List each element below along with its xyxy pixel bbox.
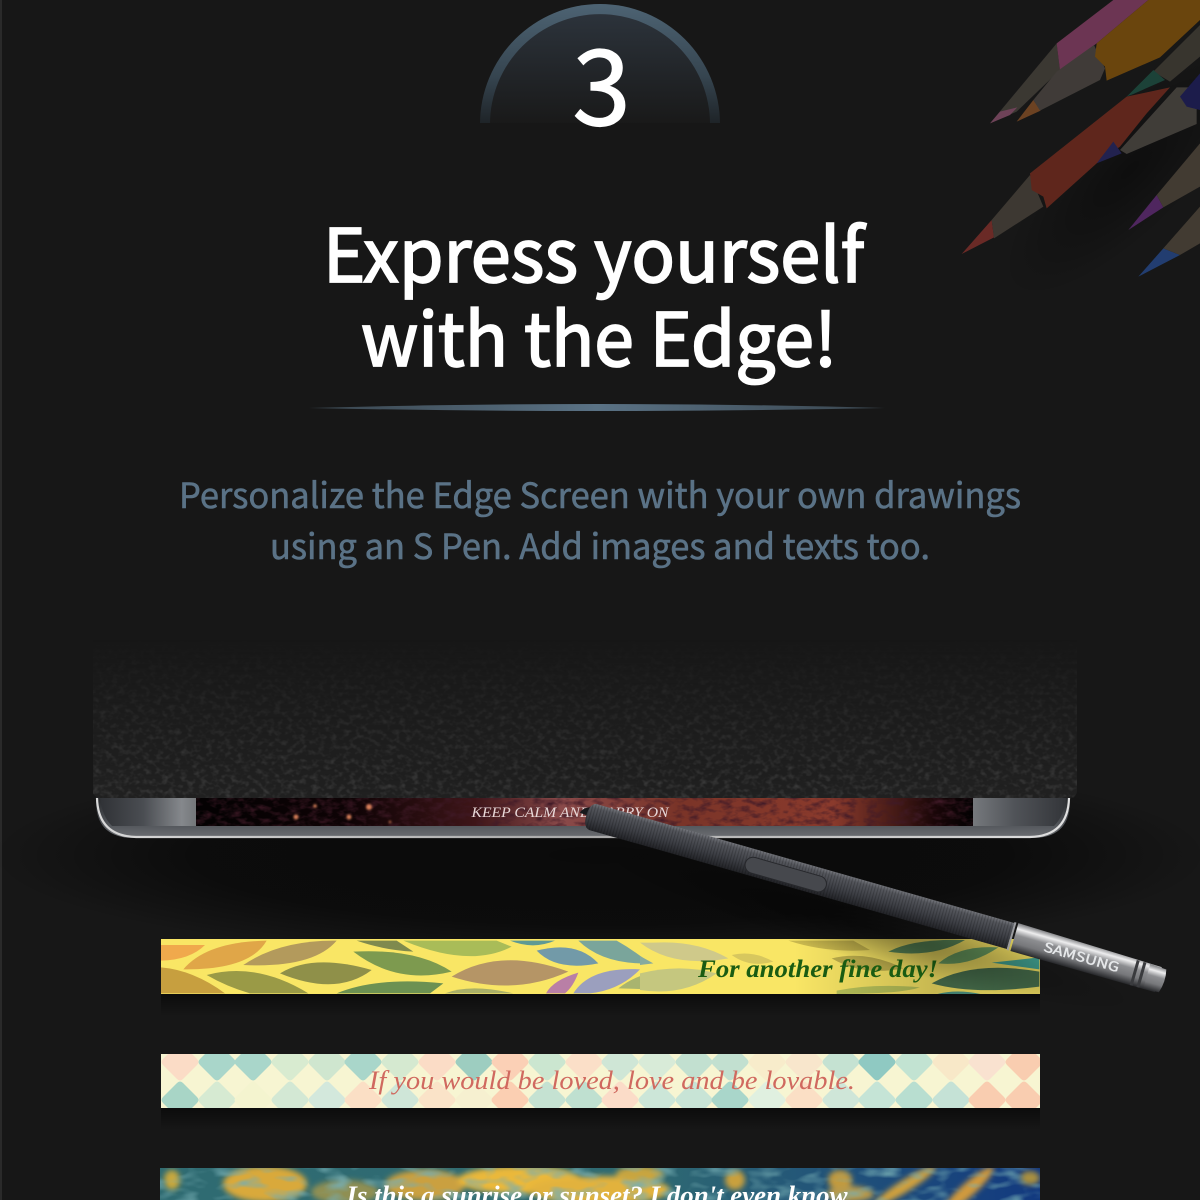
subtitle text: Personalize the Edge Screen with your own drawings (179, 468, 1021, 519)
pencils photo (962, 0, 1200, 277)
pen metal end (1007, 922, 1169, 994)
shadow under diamond strip (161, 1108, 1040, 1130)
badge: step number (470, 4, 730, 156)
shadow under leaf strip (161, 994, 1040, 1016)
title divider (309, 404, 885, 411)
pen grip body (583, 802, 1014, 949)
metal side right (973, 798, 1066, 826)
badge: step number: 3 (572, 4, 631, 156)
title: with the Edge! (361, 281, 837, 388)
strip: diamond pattern (161, 1054, 1040, 1108)
title: Express yourself (323, 197, 867, 304)
phone edge body (96, 797, 1070, 838)
subtitle text (179, 468, 1021, 570)
edge screen: KEEP CALM AND CARRY ON (470, 805, 670, 821)
edge screen (196, 798, 973, 826)
metal side left (100, 798, 196, 826)
leather cover (93, 676, 1077, 798)
bottom row (162, 1082, 1040, 1108)
strip: leaf pattern: For another fine day! (697, 956, 938, 983)
strip: sunset sky (160, 1168, 1040, 1200)
S Pen (576, 799, 1169, 994)
title (323, 197, 867, 388)
pen brand: SAMSUNG (1042, 936, 1122, 976)
pen button (743, 855, 828, 894)
strip: diamond pattern: If you would be loved, love and be lovable. (368, 1066, 855, 1095)
strip: leaf pattern (161, 939, 1040, 995)
pencil shadow (967, 7, 1200, 333)
silver rim (97, 798, 1069, 837)
pen tip (580, 804, 594, 817)
device: phone with leather cover (93, 676, 1077, 838)
subtitle text: using an S Pen. Add images and texts too. (270, 519, 930, 570)
top row (162, 1054, 1040, 1080)
shadow under device (0, 750, 1200, 960)
pen shadow (572, 812, 1148, 1038)
